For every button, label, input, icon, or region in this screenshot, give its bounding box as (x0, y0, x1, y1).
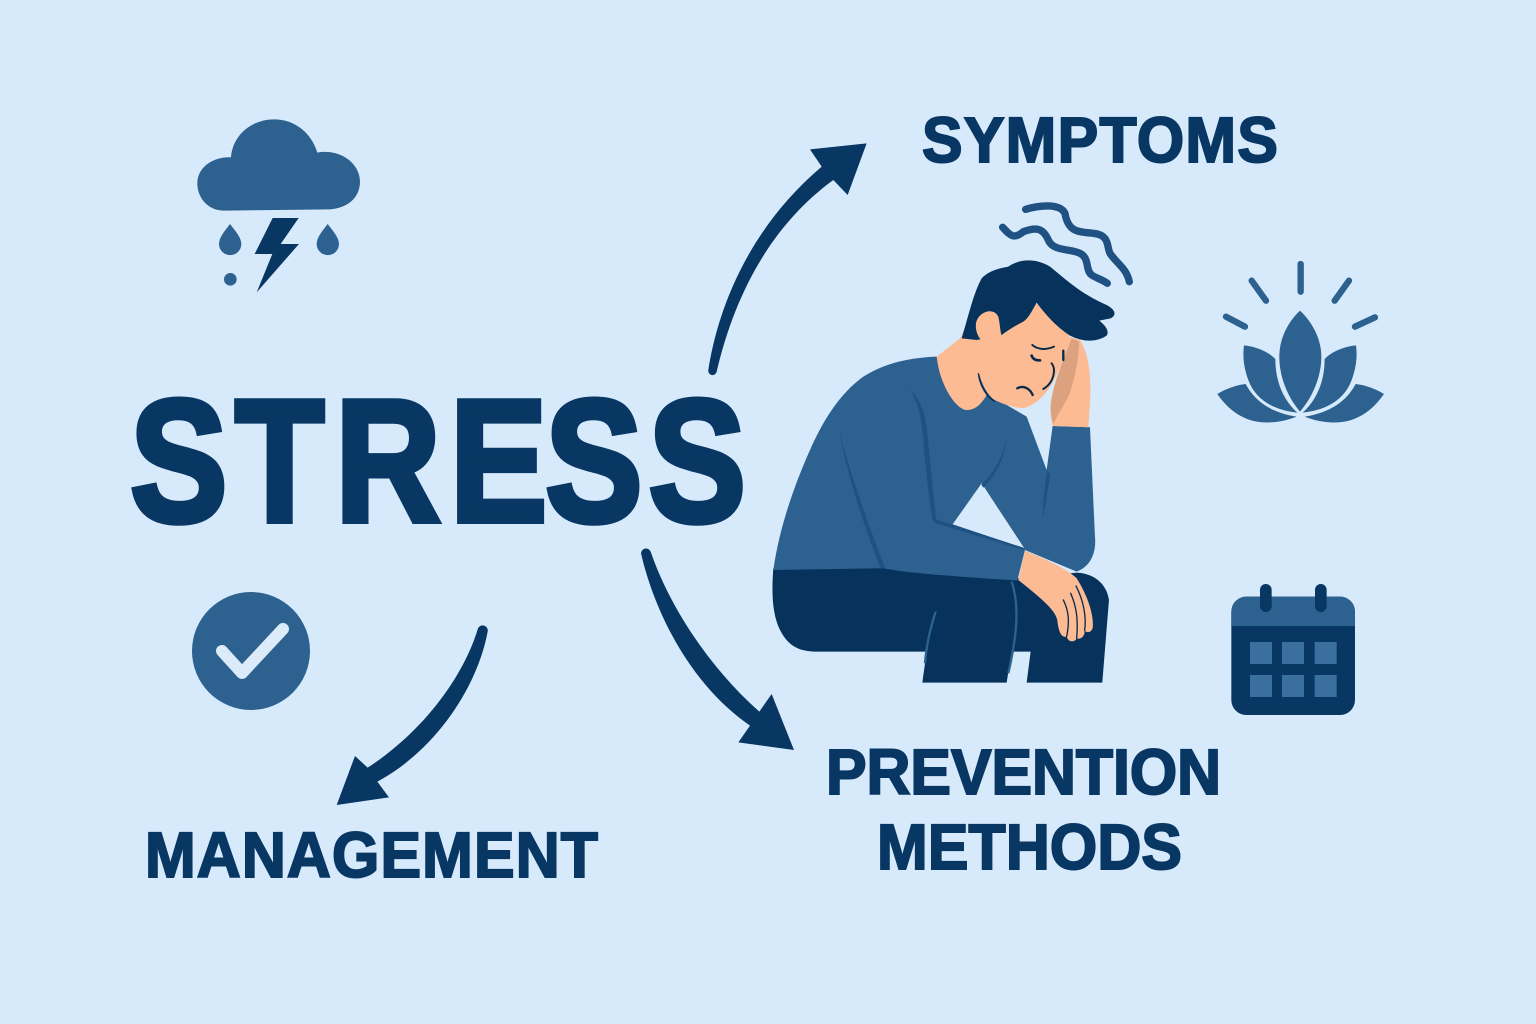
lightning bolt (255, 218, 299, 292)
cloud (197, 119, 360, 211)
heading: prevention methods: METHODS (877, 812, 1182, 883)
rain dot (224, 273, 237, 286)
title: STRESS: STRESS (130, 365, 746, 559)
hair (962, 260, 1115, 341)
neck and face (937, 303, 1070, 410)
heading: symptoms: SYMPTOMS (922, 105, 1278, 176)
heading: prevention methods (826, 737, 1221, 883)
icon: lotus (1217, 264, 1384, 422)
icon: check circle (192, 592, 310, 710)
jaw shadow (978, 373, 995, 402)
rain drop right (317, 224, 339, 255)
sweater folds (839, 389, 1050, 568)
illustration: stressed man sitting (772, 206, 1129, 683)
trousers (772, 567, 1109, 683)
trouser folds (925, 582, 1016, 673)
stress squiggles (1003, 206, 1129, 283)
finger lines (1063, 586, 1085, 638)
icon: storm cloud (197, 119, 360, 292)
heading: management: MANAGEMENT (145, 820, 598, 891)
arrow: stress to prevention (641, 548, 794, 750)
hand shadow (1051, 338, 1079, 424)
heading: prevention methods: PREVENTION (826, 737, 1221, 808)
rain drop left (219, 224, 241, 255)
ear (976, 311, 1002, 345)
hand on head (1050, 337, 1090, 427)
hand on knee (1018, 551, 1093, 641)
icon: calendar (1231, 584, 1355, 715)
arrow: stress to symptoms (708, 143, 867, 375)
arrow: stress to management (337, 625, 488, 805)
facial features (1017, 345, 1063, 395)
gap between arms (953, 483, 1024, 548)
sweater (773, 357, 1095, 581)
